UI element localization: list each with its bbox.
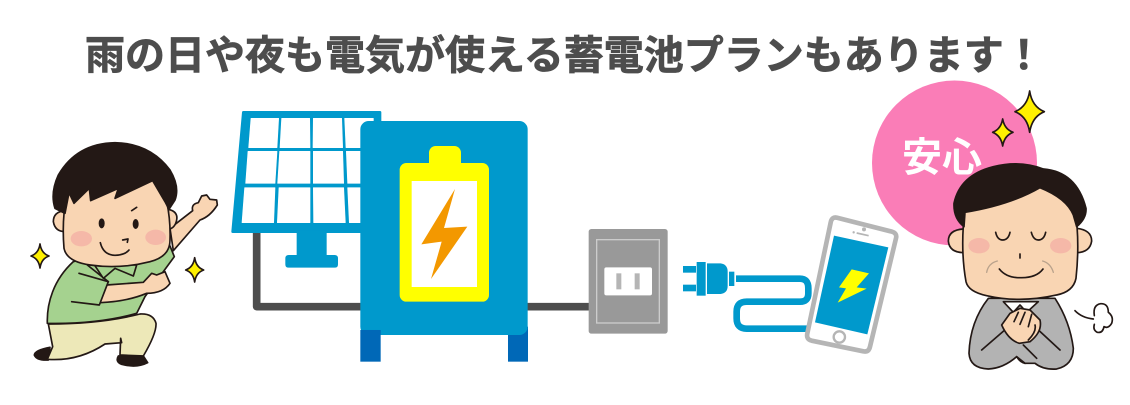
right man smile lines <box>987 261 1053 272</box>
right man suit lines <box>982 328 1060 363</box>
left man sleeve <box>72 273 108 305</box>
solar panel and battery <box>233 112 590 362</box>
smartphone <box>807 218 896 351</box>
right man suit <box>969 298 1073 369</box>
left man ears <box>53 209 177 232</box>
right man face <box>963 182 1078 299</box>
left man hair <box>53 143 177 213</box>
left sparkles <box>31 244 204 282</box>
right man clasped hands <box>1002 308 1040 343</box>
left man cheeks <box>71 230 166 246</box>
right man ears <box>948 228 1092 253</box>
right cabinet leg <box>508 327 528 362</box>
orange lightning bolt <box>421 189 467 279</box>
left man raised arm <box>170 195 217 251</box>
left cabinet leg <box>360 330 381 362</box>
right man cheeks <box>968 238 1071 253</box>
battery icon <box>400 146 489 302</box>
right man shirt <box>1003 302 1038 312</box>
right man hair <box>954 164 1086 227</box>
solar panel <box>233 112 380 268</box>
right man closed eyes, nose, mouth <box>996 232 1046 278</box>
left man collar <box>93 263 137 278</box>
power wire from panel <box>257 230 590 307</box>
wall outlet <box>589 229 668 334</box>
outlet, plug and phone <box>589 218 896 351</box>
reassurance circle <box>872 80 1037 246</box>
label: 安心: 安心 <box>902 136 982 180</box>
plug <box>683 262 734 296</box>
left man trousers <box>47 314 156 360</box>
phone screen <box>815 236 888 334</box>
phone lightning bolt <box>838 269 869 303</box>
left man giving a presentation <box>31 143 217 366</box>
title: 雨の日や夜も電気が使える蓄電池プランもあります！ <box>85 34 1044 78</box>
left man shoes <box>34 347 148 366</box>
charging cable <box>736 279 810 329</box>
right man relieved <box>948 91 1112 369</box>
left man green shirt <box>47 246 174 323</box>
left man face <box>63 163 170 267</box>
right sparkles <box>993 91 1044 146</box>
left man lower arm <box>100 272 170 303</box>
left man eyes, brow, nose, mouth <box>99 207 139 255</box>
breath puff <box>1075 304 1112 332</box>
battery cabinet <box>360 121 528 335</box>
